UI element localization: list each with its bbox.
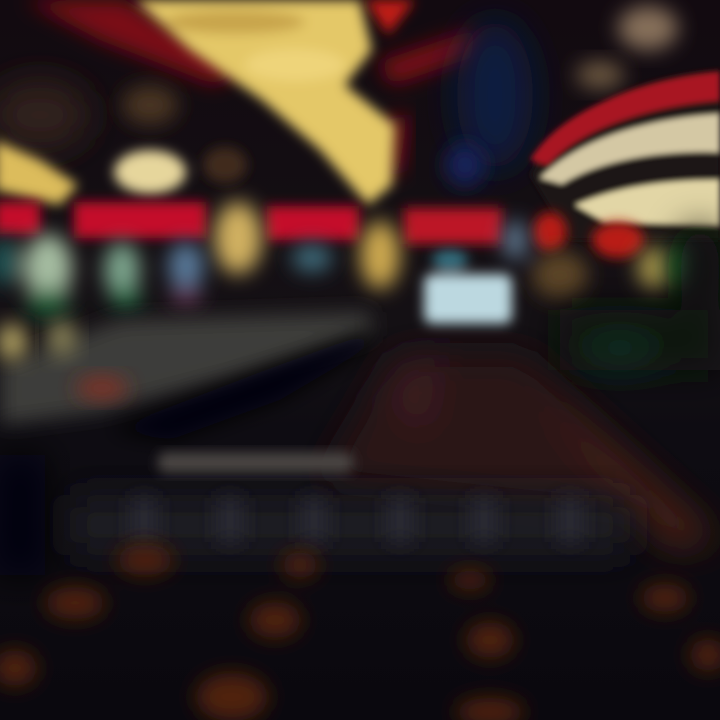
central aisle: [320, 355, 720, 550]
slot machines: [0, 234, 690, 316]
striped canopy: [530, 70, 720, 240]
dark right machines: [560, 225, 720, 370]
red sign band: [0, 202, 644, 258]
orange carpet spots: [0, 545, 720, 720]
lit panels under band: [214, 202, 673, 299]
bright screen: [424, 250, 512, 324]
left counter: [0, 312, 375, 575]
ceiling: [0, 0, 678, 187]
left lamps: [0, 140, 247, 205]
yellow ceiling light: [135, 0, 395, 205]
aisle seating row: [70, 452, 630, 555]
